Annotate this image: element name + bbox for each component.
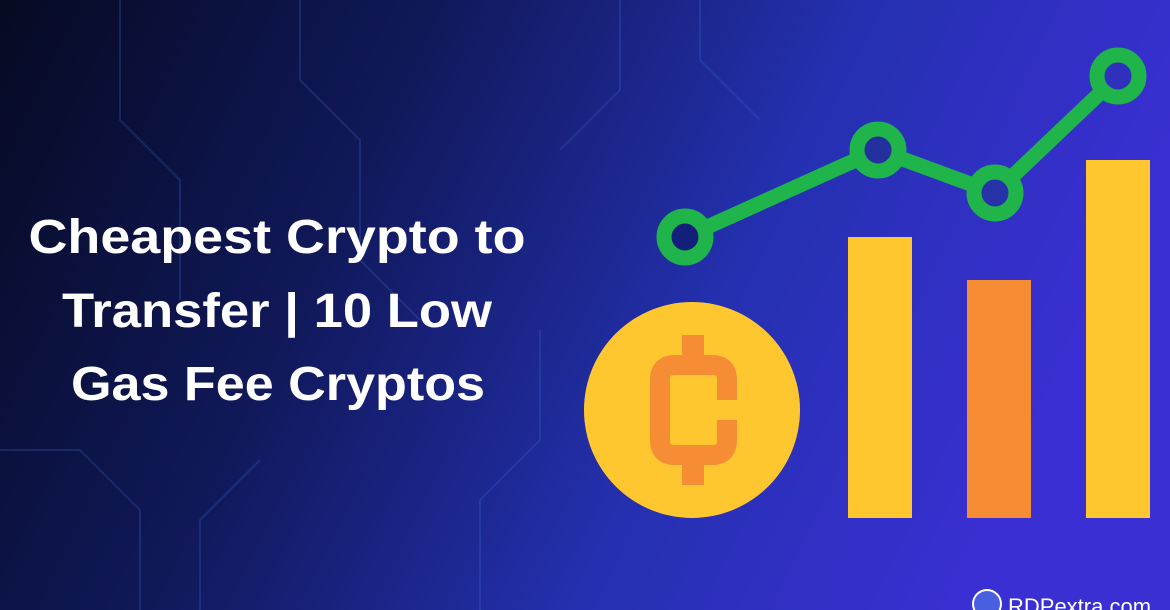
title xyxy=(28,211,526,411)
title: Transfer | 10 Low xyxy=(62,285,493,338)
bar chart xyxy=(848,160,1150,518)
title: Cheapest Crypto to xyxy=(28,211,526,264)
line chart: green trend xyxy=(664,55,1139,258)
title: Gas Fee Cryptos xyxy=(71,358,485,411)
logo xyxy=(973,590,1151,610)
icon: cent coin xyxy=(584,302,800,518)
